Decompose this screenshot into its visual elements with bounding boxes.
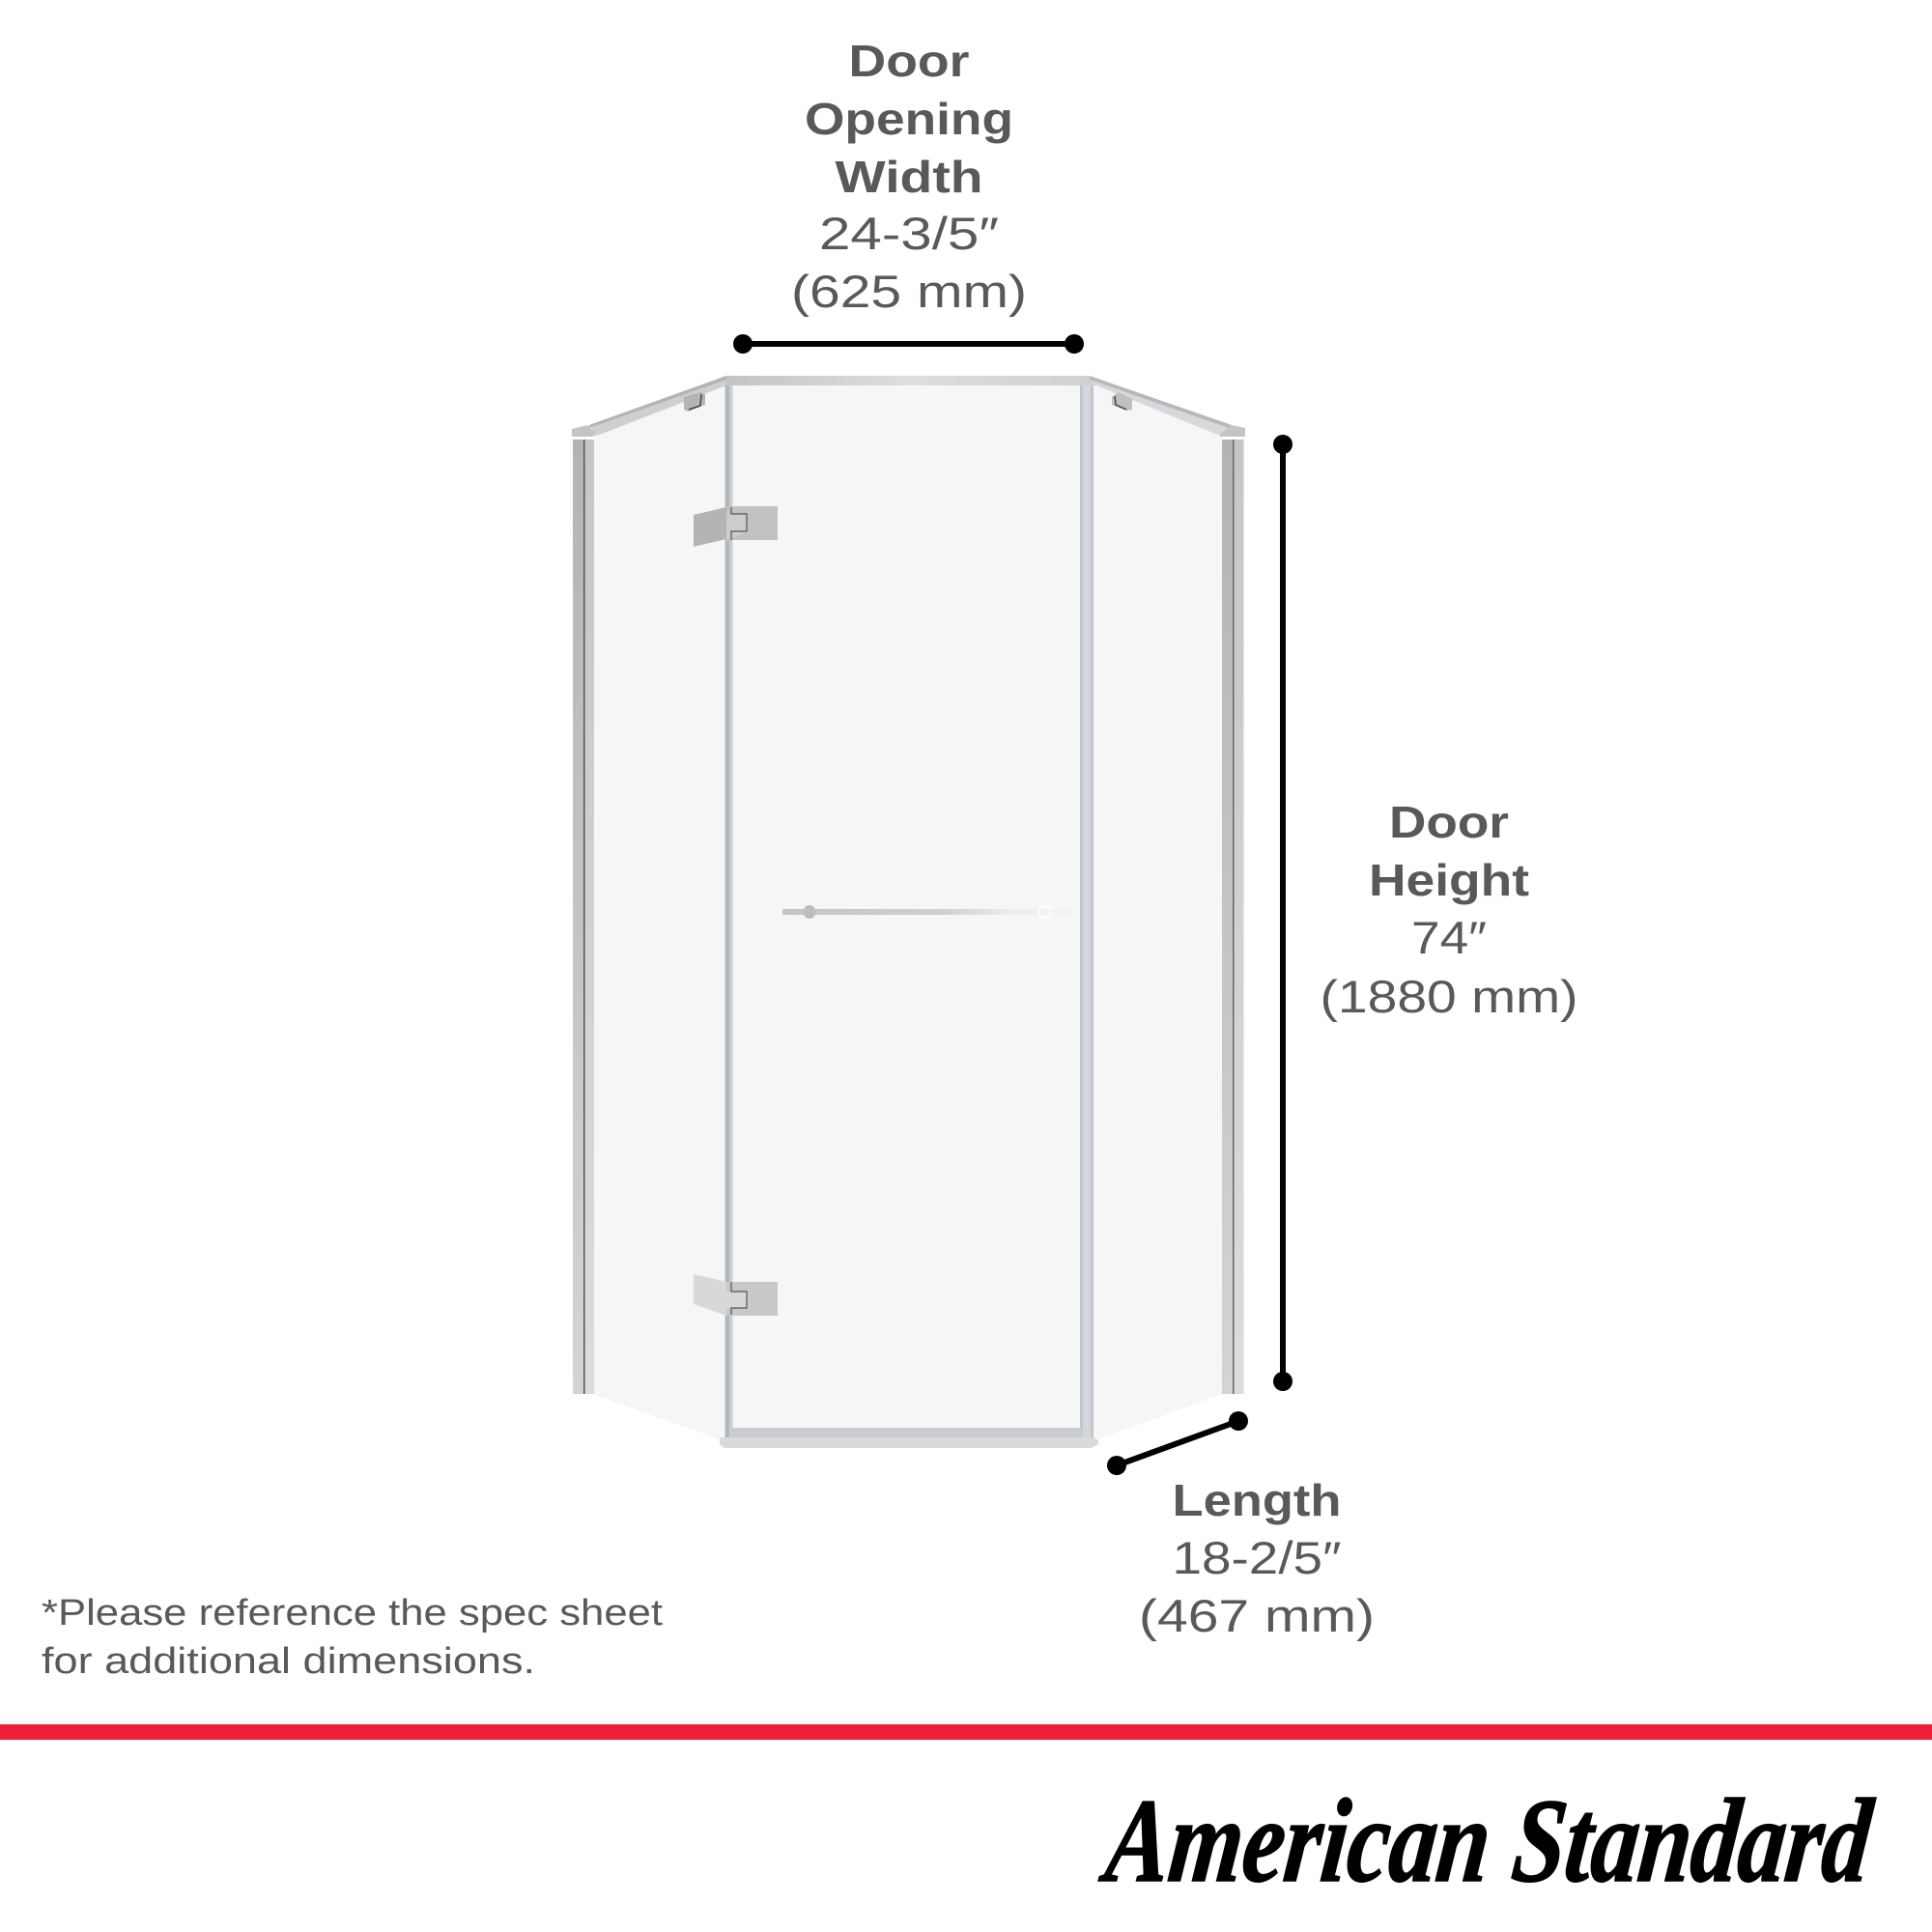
arrow: door opening width dimension [733,334,1084,354]
panel: door opening width label [791,36,1027,317]
bottom hinge [694,1274,778,1316]
value: door height [1320,912,1578,1022]
red divider bar [0,1724,1932,1740]
top-right clip [1112,392,1132,411]
panel: length label [1139,1475,1375,1641]
arrow: door height dimension [1273,435,1293,1391]
value: length: (467 mm) [1139,1590,1375,1641]
footnote: for additional dimensions. [42,1641,535,1682]
heading: door opening width [805,36,1013,202]
value: door opening width: (625 mm) [791,266,1027,317]
footnote: *Please reference the spec sheet [42,1593,664,1634]
heading: door opening width: Door [848,36,970,86]
left corner block [572,425,597,437]
heading: door opening width: Width [835,152,983,202]
top rail [726,376,1096,385]
left glass panel [592,384,726,1439]
door handle [782,905,1070,919]
value: door height: (1880 mm) [1320,971,1578,1022]
heading: length: Length [1173,1475,1341,1525]
panel: door height label [1320,797,1578,1022]
heading: door height: Height [1369,855,1529,905]
left wall post [573,440,594,1394]
illustration: neo-angle shower enclosure [572,376,1245,1448]
value: door opening width [791,208,1027,317]
value: door opening width: 24-3/5″ [819,208,999,259]
right wall post [1222,440,1244,1394]
bottom rail [720,1428,1098,1448]
heading: door opening width: Opening [805,94,1013,144]
top hinge [694,506,778,547]
left top rail [589,376,726,436]
right top rail [1090,376,1232,436]
value: door height: 74″ [1411,912,1487,963]
right corner block [1220,425,1245,437]
footnote [42,1593,664,1682]
door left stile [724,385,732,1439]
value: length: 18-2/5″ [1173,1532,1341,1583]
value: length [1139,1532,1375,1641]
top-left clip [684,392,705,412]
heading: door height: Door [1389,797,1509,847]
heading: door height [1369,797,1529,905]
arrow: length dimension [1107,1411,1248,1475]
door glass panel [732,385,1082,1429]
right glass panel [1094,384,1222,1439]
door right stile [1080,385,1094,1439]
